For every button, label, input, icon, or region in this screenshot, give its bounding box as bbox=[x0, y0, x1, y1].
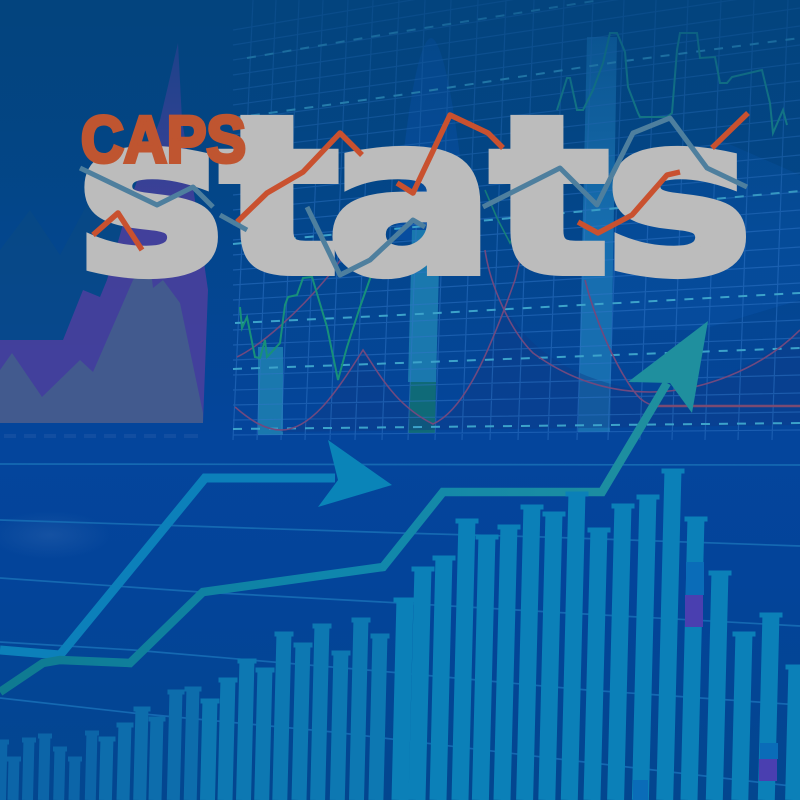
blue bell hill bbox=[395, 38, 470, 240]
right side light wedge bbox=[583, 140, 800, 330]
purple area series bbox=[0, 43, 208, 423]
second arrow head bbox=[628, 321, 708, 413]
candlestick trace middle bbox=[485, 190, 517, 243]
steel blue trend line bbox=[80, 118, 747, 275]
small bar caps bbox=[0, 733, 99, 759]
highlighted bar segments bbox=[633, 562, 778, 800]
shaded area under curves bbox=[281, 280, 800, 432]
panel: lower bar chart and arrows bbox=[0, 321, 800, 800]
small bars bbox=[0, 731, 92, 800]
purple segment upper bbox=[685, 595, 703, 627]
glow patch bbox=[0, 511, 110, 559]
panel: right line chart with grid bbox=[0, 0, 800, 440]
curves bbox=[235, 240, 800, 430]
tall bar caps bbox=[394, 471, 800, 667]
arrow: second trend line bbox=[0, 321, 708, 692]
medium bars bbox=[105, 687, 193, 800]
large bar caps bbox=[200, 620, 390, 701]
title: CAPS: CAPS bbox=[81, 102, 246, 176]
purple segment lower bbox=[759, 759, 777, 781]
candlestick trace left bbox=[240, 273, 372, 380]
tall bars bbox=[400, 469, 797, 800]
blurred axis labels bbox=[4, 434, 198, 438]
arrow: first trend line bbox=[0, 440, 392, 655]
grey area series bbox=[0, 262, 203, 423]
green bar section bbox=[408, 382, 436, 433]
blue segment lower bbox=[760, 743, 778, 759]
pale vertical bar 2 bbox=[408, 230, 440, 382]
bar chart bbox=[0, 469, 800, 800]
pale vertical bar 1 bbox=[258, 347, 283, 435]
panel: left area chart bbox=[0, 43, 208, 436]
first arrow head bbox=[318, 440, 392, 507]
top fade overlay bbox=[0, 0, 800, 230]
title: stats: stats bbox=[76, 71, 753, 324]
blue segment bottom bbox=[633, 780, 648, 800]
dashed level lines bbox=[233, 0, 800, 429]
horizontal guide lines bbox=[0, 464, 800, 787]
grid lines bbox=[233, 0, 800, 440]
flat curve tail bbox=[655, 405, 800, 407]
faint back area bbox=[0, 180, 150, 345]
blue segment upper bbox=[686, 562, 704, 595]
candlestick trace top bbox=[557, 33, 787, 133]
medium bar caps bbox=[98, 689, 202, 739]
large bars bbox=[208, 618, 380, 800]
orange trend line bbox=[93, 113, 748, 250]
pale vertical bar 3 bbox=[578, 37, 617, 432]
